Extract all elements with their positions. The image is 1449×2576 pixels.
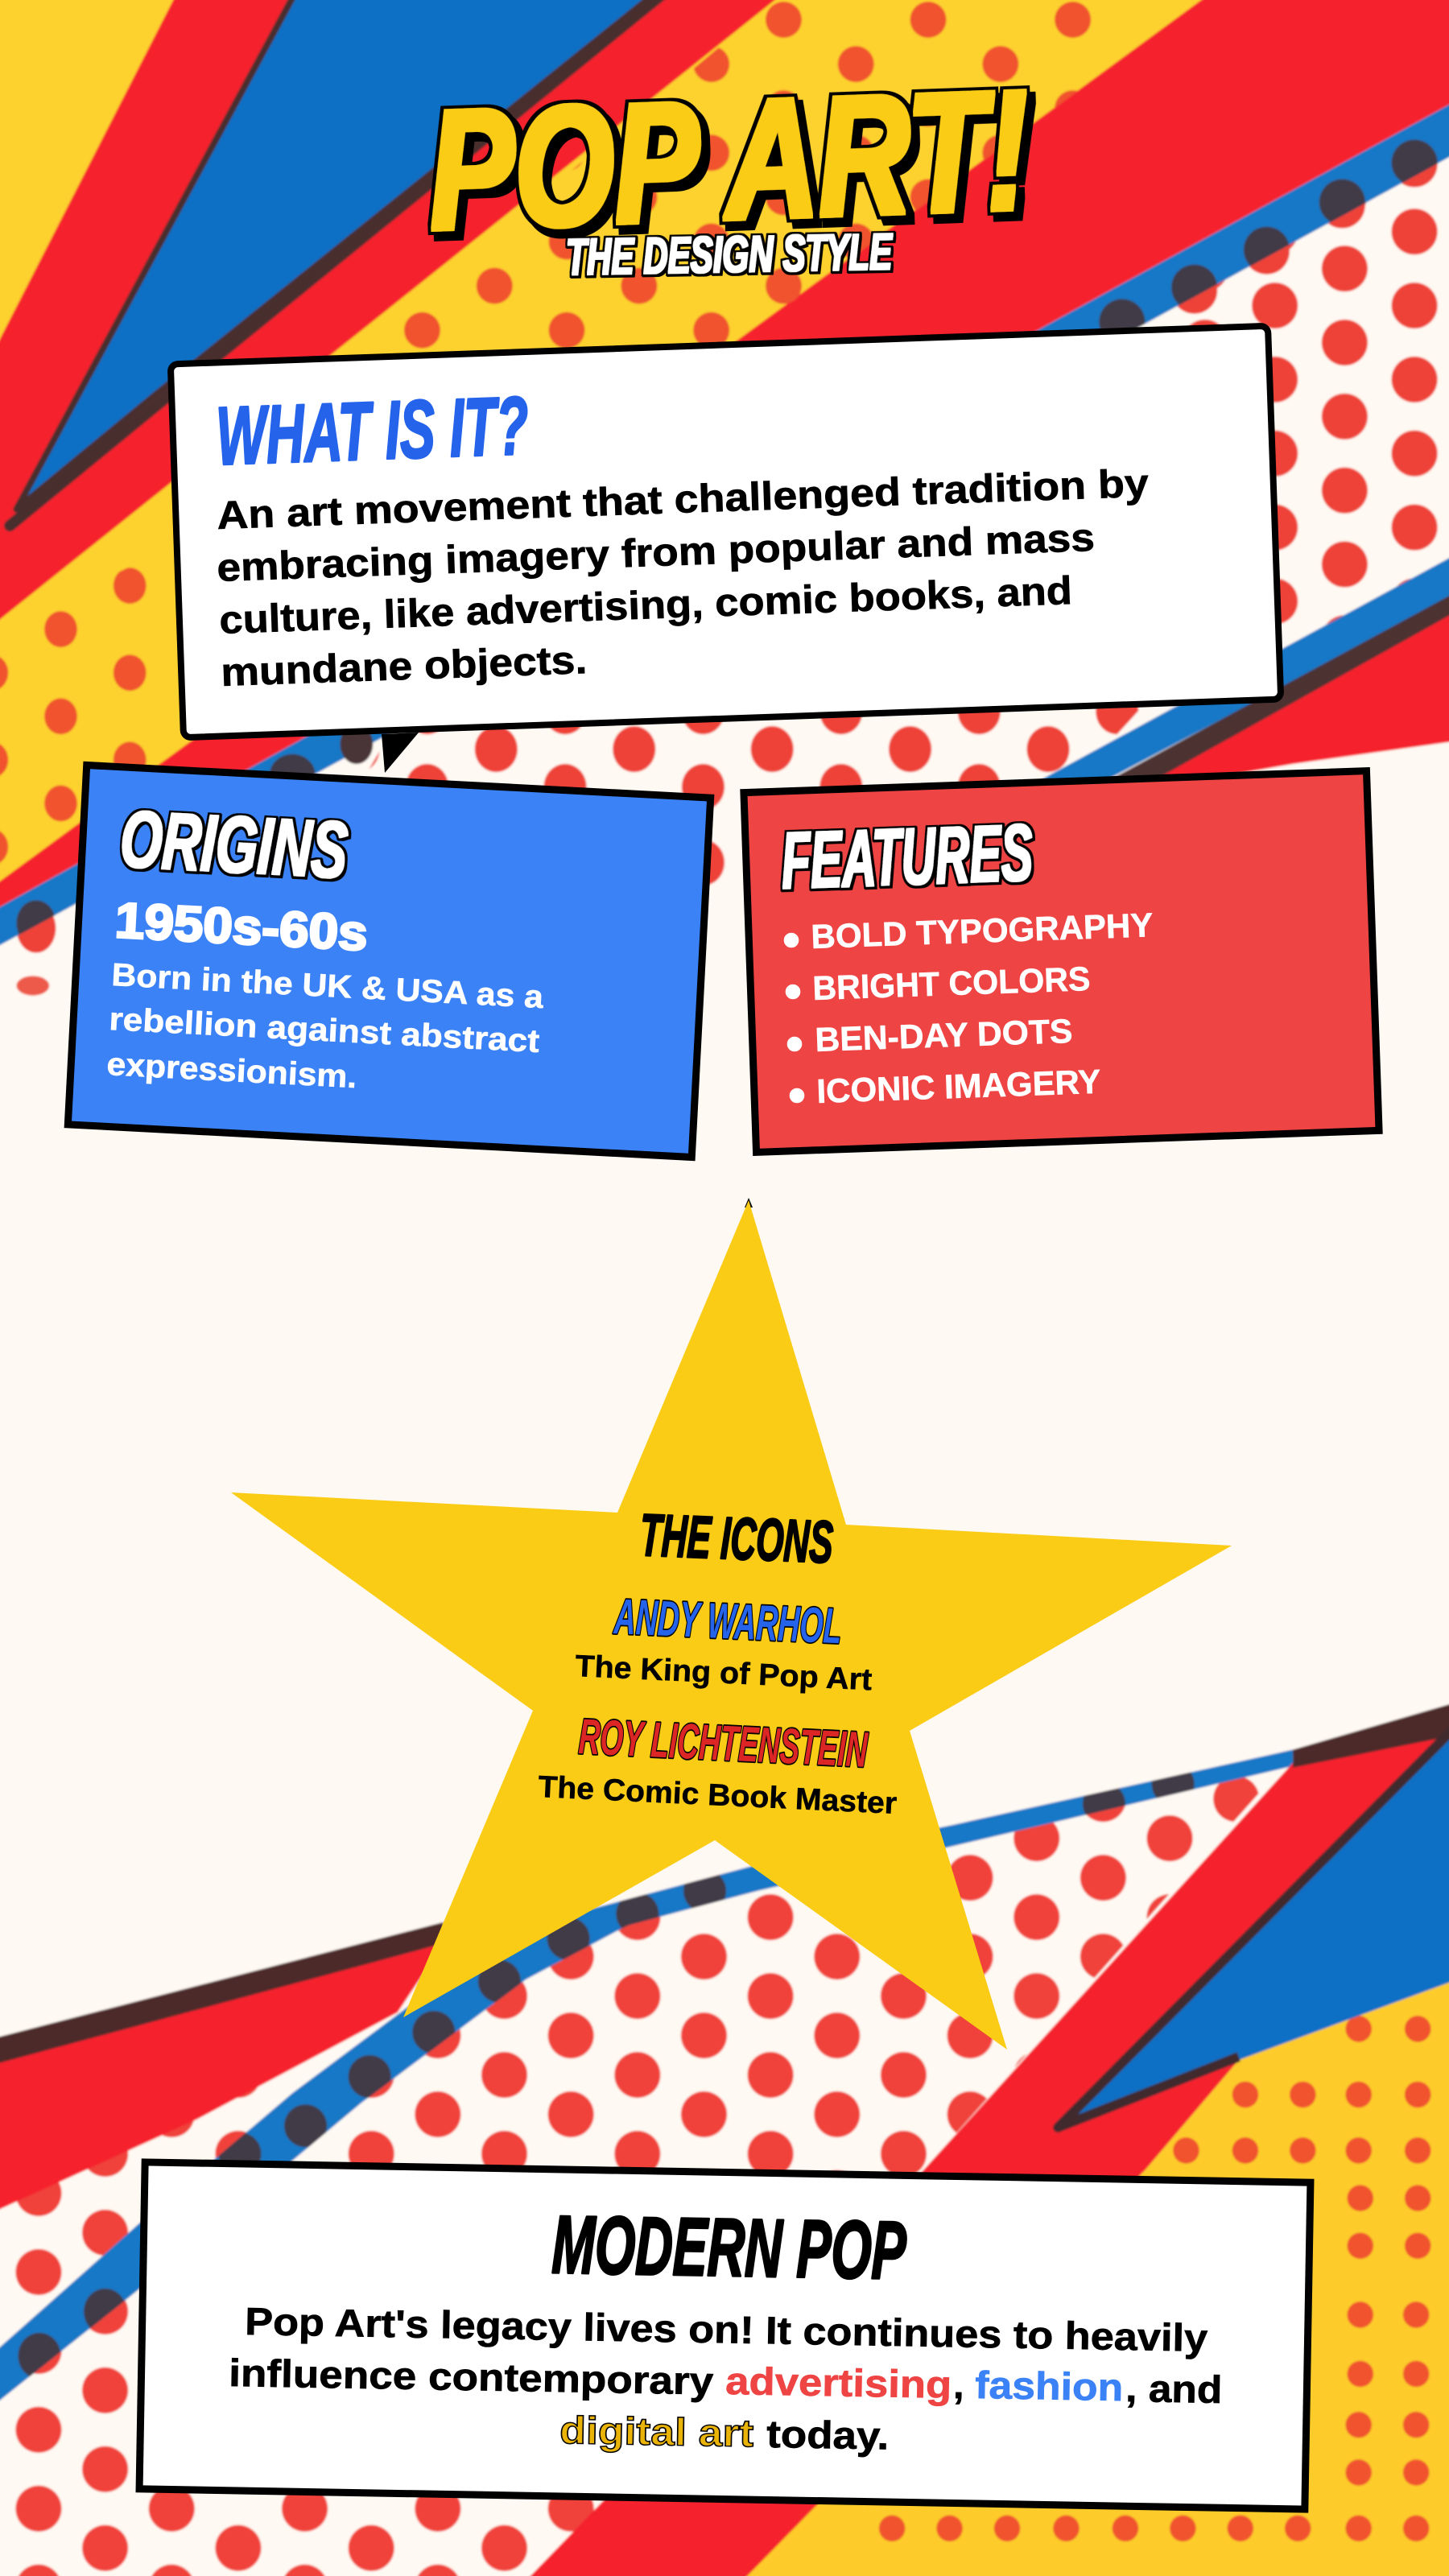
feature list: BOLD TYPOGRAPHY [811, 906, 1154, 956]
modern pop text: fashion [975, 2364, 1124, 2409]
cream dots right [1149, 131, 1449, 654]
red dots under top blue band [16, 142, 1438, 953]
speech bubble tail [382, 733, 419, 773]
top blue lightning shard [16, 0, 657, 510]
bottom-right yellow dots [879, 2016, 1431, 2541]
bottom cream dots [0, 1749, 1298, 2576]
bottom red lightning [522, 1735, 1449, 2576]
name: andy warhol: ANDY WARHOL [612, 1589, 843, 1654]
title: POP ART!: POP ART! [426, 54, 1032, 266]
modern pop text: Pop Art's legacy lives on! It continues to heavily [245, 2301, 1208, 2360]
caption: comic book master: The Comic Book Master [538, 1770, 898, 1821]
faded dot left [16, 976, 49, 996]
modern pop text: today. [766, 2413, 890, 2458]
dark patch near tail [340, 724, 373, 764]
name: roy lichtenstein: ROY LICHTENSTEIN [577, 1709, 869, 1778]
feature list [784, 906, 1154, 1110]
diagonal yellow band [0, 0, 1212, 887]
bottom dark stripe right [1293, 1702, 1449, 1768]
body text: An art movement that challenged tradition by [216, 462, 1150, 538]
bottom blue curved band [0, 1749, 1293, 2407]
body text: embracing imagery from popular and mass [216, 516, 1096, 590]
panel: what is it [171, 326, 1281, 773]
modern pop text: , [953, 2364, 964, 2407]
dark lightning edge [10, 0, 666, 526]
yellow band dots top [353, 0, 1212, 353]
star tip [745, 1198, 753, 1208]
card [171, 326, 1281, 737]
heading: modern pop: MODERN POP [551, 2198, 907, 2297]
dark dots on bottom blue band [18, 1763, 1195, 2379]
heading: features: FEATURES [780, 807, 1034, 906]
feature list: BRIGHT COLORS [812, 960, 1091, 1007]
top red field [0, 0, 1449, 912]
yellow band dots left [0, 551, 164, 884]
panel: modern pop [139, 2162, 1311, 2509]
body text: culture, like advertising, comic books, and [218, 569, 1073, 642]
subtitle: the design style: THE DESIGN STYLE [566, 222, 894, 287]
origins text [106, 957, 545, 1095]
bottom blue lightning shard [1058, 1732, 1449, 2128]
bottom-left dark stripe [0, 1922, 444, 2066]
feature list: ICONIC IMAGERY [816, 1063, 1101, 1110]
bottom shard outline [1058, 1725, 1449, 2128]
top-left yellow wedge [0, 0, 177, 355]
modern pop text: digital art [559, 2409, 754, 2455]
modern pop text: advertising [725, 2360, 952, 2407]
star shape [231, 1200, 1232, 2050]
heading: what is it: WHAT IS IT? [215, 380, 530, 482]
modern pop text: influence contemporary [229, 2352, 714, 2404]
red band lower right [1133, 611, 1449, 792]
panel: features [744, 771, 1379, 1152]
origins text: Born in the UK & USA as a [111, 957, 545, 1015]
cream dots under card [328, 698, 1150, 887]
bottom-right yellow field [731, 1979, 1449, 2576]
feature list: BEN-DAY DOTS [815, 1012, 1073, 1059]
top blue band [0, 100, 1449, 950]
modern pop text: , and [1125, 2368, 1223, 2412]
body text: mundane objects. [220, 638, 588, 695]
origins text: rebellion against abstract [109, 1001, 540, 1059]
caption: king of pop art: The King of Pop Art [575, 1649, 873, 1697]
panel: the icons star [231, 1198, 1232, 2050]
dark dots on top blue band [16, 139, 1438, 947]
panel: origins [68, 765, 711, 1158]
heading: the icons: THE ICONS [638, 1501, 834, 1575]
bottom-left red wedge [0, 1943, 444, 2213]
modern pop text [229, 2301, 1223, 2458]
heading: origins: ORIGINS [118, 794, 349, 896]
body text [216, 462, 1150, 695]
origins text: expressionism. [106, 1046, 357, 1095]
date: 1950s-60s [114, 893, 369, 961]
dark band lower right [1088, 592, 1449, 792]
blue band lower right [1018, 554, 1449, 792]
